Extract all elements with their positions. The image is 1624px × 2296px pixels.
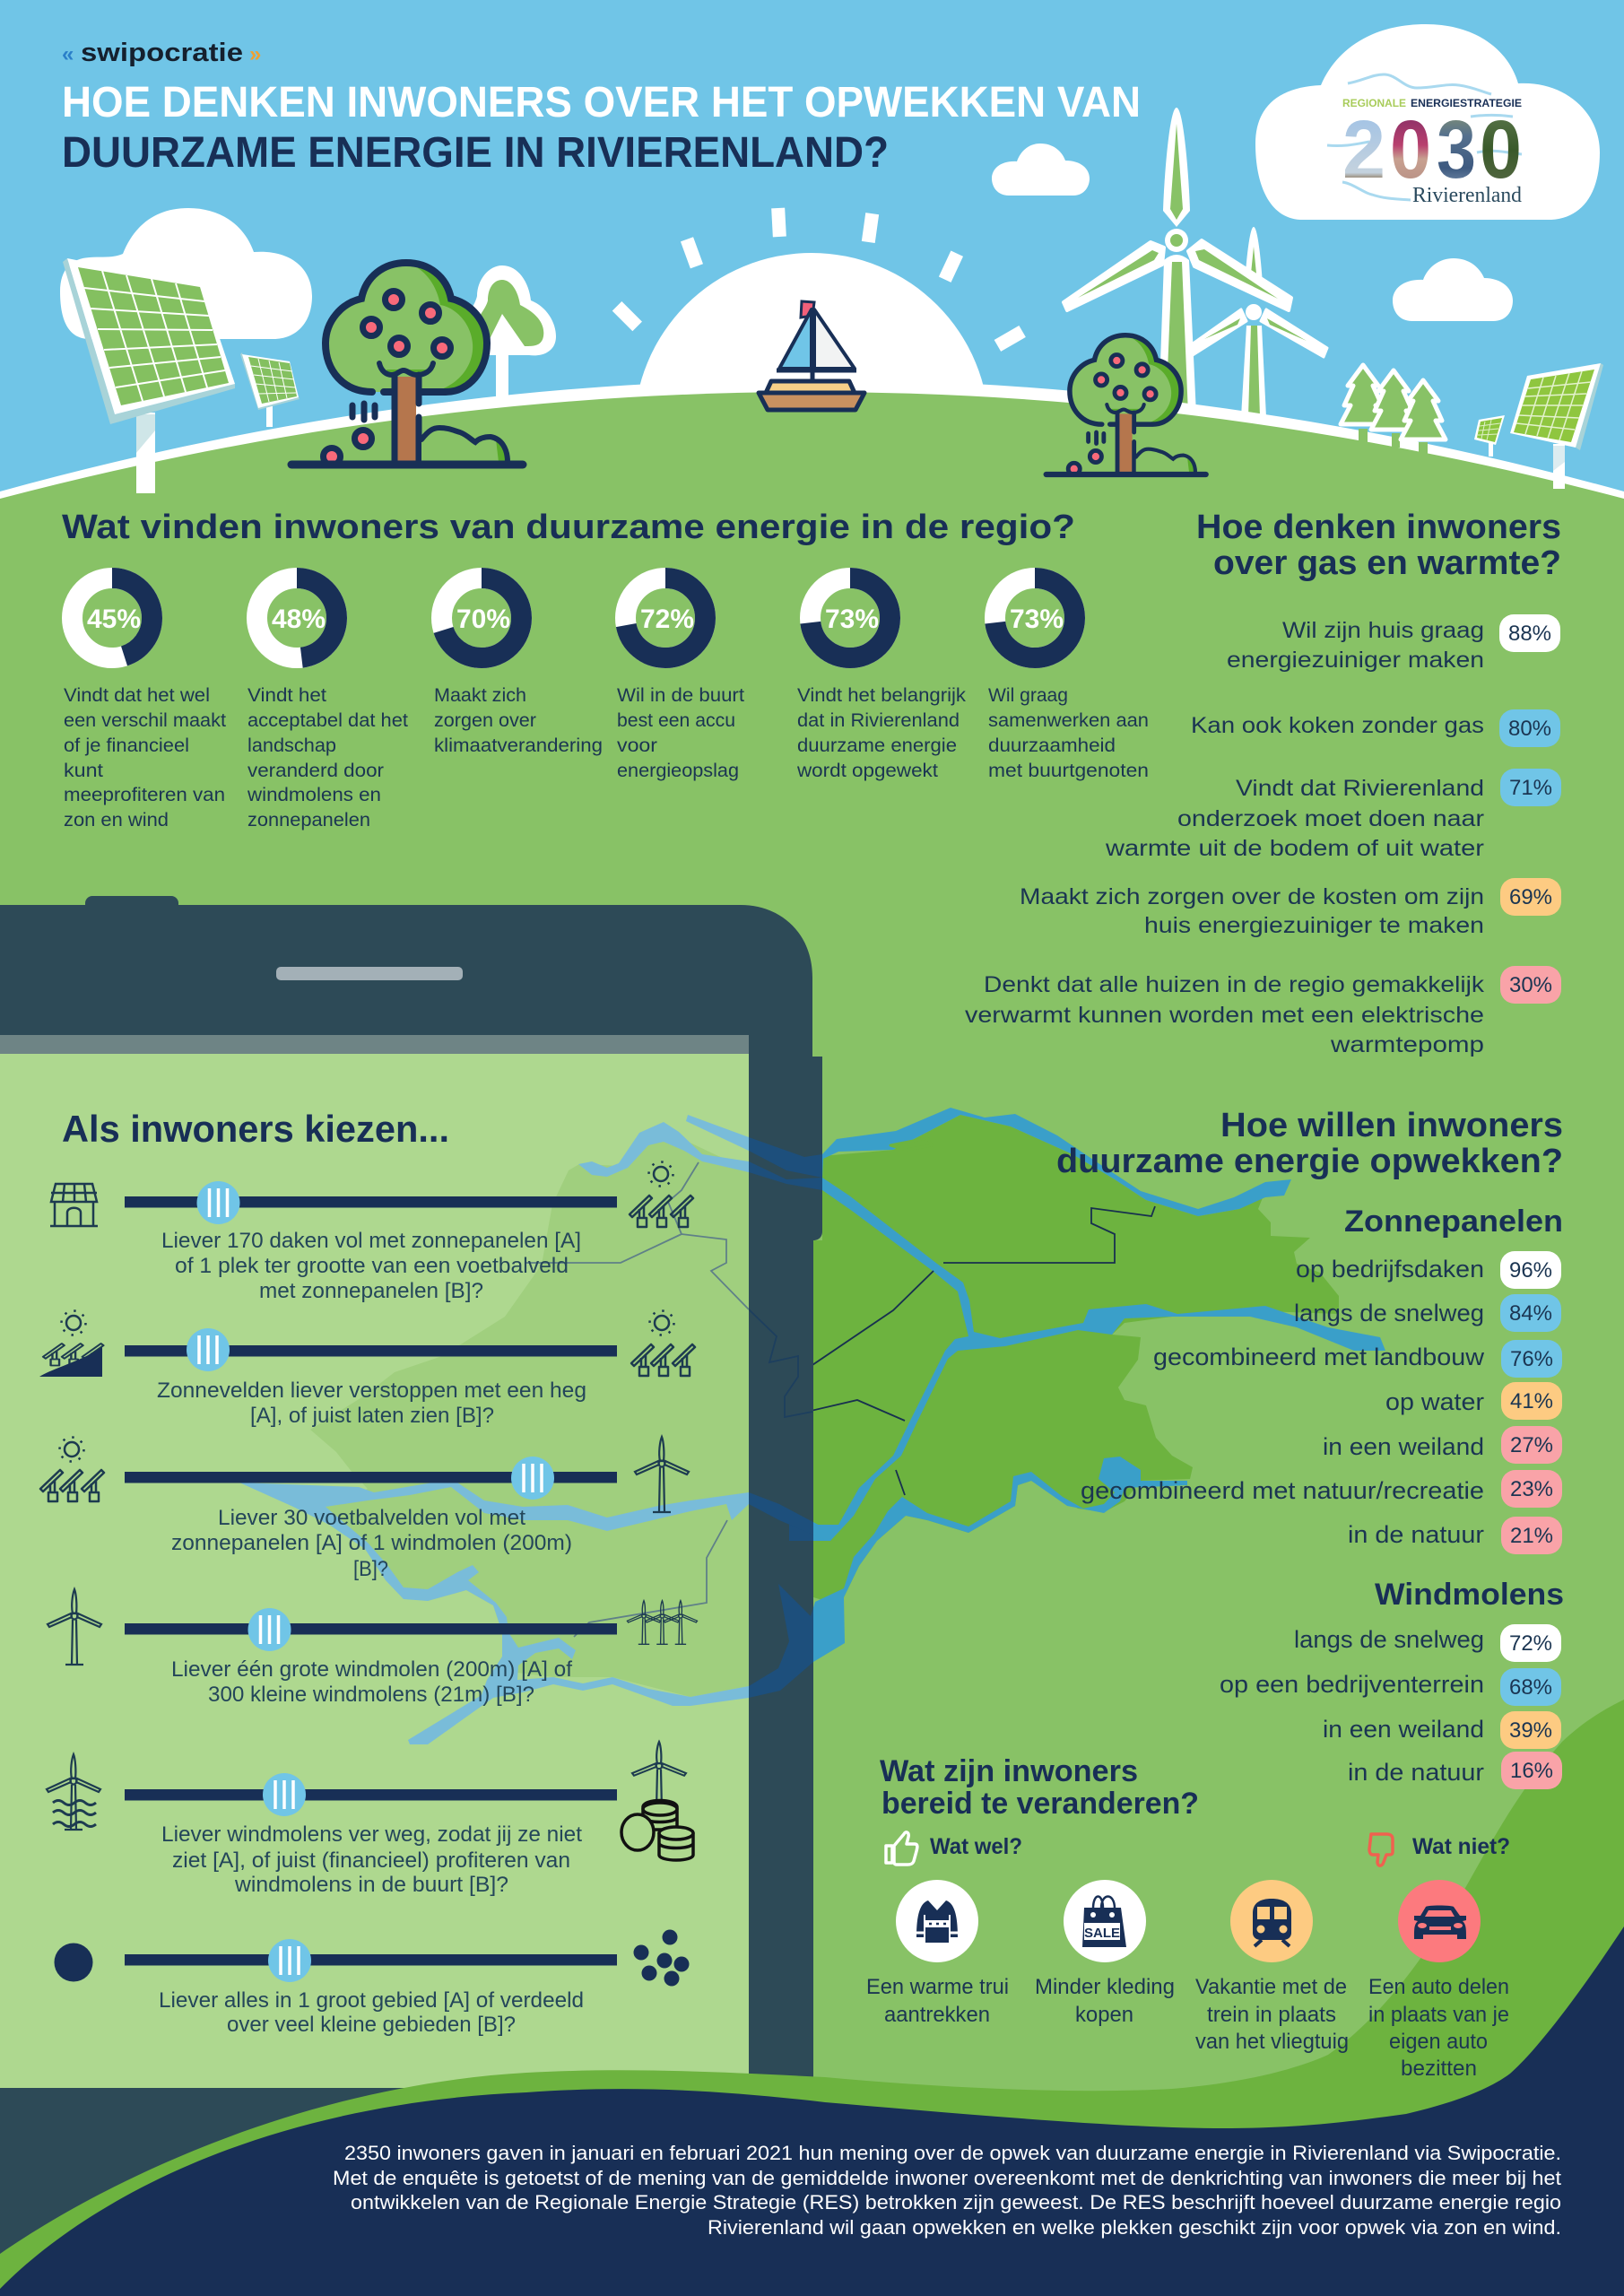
solar panel large right	[1510, 363, 1603, 489]
caption 1	[64, 685, 226, 831]
title	[62, 79, 1141, 177]
row 80%	[1191, 709, 1560, 747]
curve: bottom navy	[0, 1926, 1624, 2296]
caption slider 2: Zonnevelden liever verstoppen met een heg	[157, 1378, 586, 1403]
row 30%	[965, 966, 1561, 1057]
logo cloud: Regionale Energiestrategie 2030 Rivierenland: 0	[1390, 104, 1431, 196]
map of Rivierenland	[239, 1108, 1385, 1744]
heading: opwekken: Hoe willen inwoners	[1220, 1107, 1563, 1144]
icon: thumbs up	[886, 1832, 917, 1865]
logo cloud: Regionale Energiestrategie 2030 Rivierenland: 2	[1342, 104, 1385, 196]
row gecombineerd met natuur: gecombineerd met natuur/recreatie	[1081, 1477, 1484, 1504]
logo cloud: Regionale Energiestrategie 2030 Rivierenland: REGIONALE	[1342, 99, 1406, 109]
caption 2: Vindt het	[248, 685, 326, 706]
caption 3: zorgen over	[434, 710, 536, 731]
caption 2: zonnepanelen	[248, 810, 370, 831]
icon: shopping bag sale: SALE	[1084, 1926, 1120, 1941]
row in een weiland: 27%	[1510, 1433, 1553, 1457]
icon: sun and solar field	[631, 1311, 695, 1376]
icon: wind turbine	[48, 1589, 101, 1665]
slider 4	[48, 1589, 698, 1707]
icon: one area	[54, 1943, 93, 1982]
logo cloud: Regionale Energiestrategie 2030 Rivierenland: 3	[1437, 104, 1476, 196]
caption slider 5: windmolens in de buurt [B]?	[234, 1873, 508, 1897]
heading: bereid te veranderen: bereid te veranderen?	[881, 1787, 1199, 1821]
logo cloud: Regionale Energiestrategie 2030 Rivierenland: 0	[1480, 104, 1522, 196]
donut 72%: 72%	[640, 604, 694, 634]
icon: car	[1398, 1880, 1481, 1962]
cloud left behind solar panel	[60, 208, 312, 339]
row 71%: warmte uit de bodem of uit water	[1105, 836, 1484, 861]
caption 6: duurzaamheid	[988, 735, 1116, 756]
row langs de snelweg: 84%	[1509, 1301, 1552, 1326]
title: HOE DENKEN INWONERS OVER HET OPWEKKEN VAN	[62, 79, 1141, 126]
donut captions	[64, 685, 1149, 831]
subheading: zonnepanelen: Zonnepanelen	[1344, 1205, 1563, 1239]
caption: minder kleding: kopen	[1075, 2003, 1133, 2027]
row op een bedrijventerrein: 68%	[1509, 1675, 1552, 1700]
row in de natuur	[1348, 1752, 1562, 1789]
sun	[612, 208, 1026, 608]
caption 2: acceptabel dat het	[248, 710, 408, 731]
caption 6: Wil graag	[988, 685, 1068, 706]
caption 6: samenwerken aan	[988, 710, 1149, 731]
caption: warme trui: Een warme trui	[866, 1975, 1009, 1999]
caption 3	[434, 685, 603, 756]
caption slider 3: Liever 30 voetbalvelden vol met	[218, 1506, 525, 1530]
panel: als inwoners kiezen	[39, 1108, 698, 2037]
donut 48%: 48%	[272, 604, 326, 634]
caption 6	[988, 685, 1149, 781]
icon: train	[1230, 1880, 1313, 1962]
row 71%: Vindt dat Rivierenland	[1236, 776, 1484, 801]
row op een bedrijventerrein	[1220, 1668, 1561, 1706]
donut 70%	[441, 578, 522, 658]
slider 3	[40, 1437, 689, 1581]
caption 2	[247, 685, 408, 831]
caption: trein: van het vliegtuig	[1195, 2030, 1349, 2054]
donut 45%	[72, 578, 152, 658]
row op water: 41%	[1510, 1389, 1553, 1413]
caption slider 3	[171, 1506, 572, 1581]
footer text: Met de enquête is getoetst of de mening van de gemiddelde inwoner overeenkomt met de denkrichting van inwoners die meer bij het	[333, 2167, 1562, 2189]
caption 3: klimaatverandering	[434, 735, 603, 756]
row in een weiland	[1323, 1426, 1562, 1464]
icon: warm sweater	[896, 1880, 978, 1962]
row in een weiland: in een weiland	[1323, 1433, 1484, 1460]
row in de natuur: in de natuur	[1348, 1759, 1484, 1786]
apple tree right	[1046, 335, 1206, 474]
row langs de snelweg	[1294, 1624, 1561, 1662]
caption slider 1: of 1 plek ter grootte van een voetbalveld	[175, 1254, 569, 1278]
row 69%: Maakt zich zorgen over de kosten om zijn	[1020, 884, 1484, 909]
caption 2: veranderd door	[248, 761, 384, 781]
donut 73% buurt: 73%	[1010, 604, 1064, 634]
donut 70%: 70%	[456, 604, 510, 634]
sky background	[0, 0, 1624, 556]
slider 6	[54, 1930, 689, 2037]
map: land and water on screen	[240, 1115, 749, 1744]
row in een weiland	[1323, 1711, 1561, 1749]
logo cloud: Regionale Energiestrategie 2030 Rivierenland: ENERGIESTRATEGIE	[1411, 99, 1522, 109]
caption 5: wordt opgewekt	[796, 761, 938, 781]
heading: bereid te veranderen	[880, 1754, 1199, 1821]
donut 73% buurt	[995, 578, 1074, 658]
caption 1: zon en wind	[64, 810, 169, 831]
caption: warme trui: aantrekken	[884, 2003, 990, 2027]
caption: auto delen: Een auto delen	[1368, 1975, 1509, 1999]
solar panel large left	[63, 258, 235, 493]
wind turbine small	[1189, 227, 1327, 417]
tablet body	[0, 896, 822, 2296]
solar panel small left	[240, 352, 300, 427]
row gecombineerd met landbouw: 76%	[1510, 1347, 1553, 1371]
row op een bedrijventerrein: op een bedrijventerrein	[1220, 1671, 1484, 1698]
row 80%: 80%	[1508, 717, 1551, 741]
row 71%	[1105, 769, 1561, 861]
pine trees	[1341, 365, 1446, 457]
heading: bereid te veranderen: Wat zijn inwoners	[880, 1754, 1138, 1788]
row 30%: 30%	[1509, 973, 1552, 997]
caption 6: met buurtgenoten	[988, 761, 1149, 781]
logo cloud: Regionale Energiestrategie 2030 Rivierenland: Rivierenland	[1412, 184, 1522, 207]
label: wat niet: Wat niet?	[1412, 1834, 1510, 1859]
caption: trein: trein in plaats	[1207, 2003, 1336, 2027]
footer text	[333, 2142, 1562, 2239]
row in de natuur: 21%	[1510, 1524, 1553, 1548]
row langs de snelweg: 72%	[1509, 1631, 1552, 1656]
row op bedrijfsdaken	[1296, 1251, 1561, 1289]
title: DUURZAME ENERGIE IN RIVIERENLAND?	[62, 129, 889, 177]
row 69%: 69%	[1509, 885, 1552, 909]
row 88%: 88%	[1508, 622, 1551, 646]
row 71%: 71%	[1509, 776, 1552, 800]
heading: als inwoners kiezen: Als inwoners kiezen...	[62, 1108, 449, 1150]
heading: opwekken: duurzame energie opwekken?	[1056, 1143, 1563, 1180]
row op water	[1385, 1382, 1562, 1420]
icon: wind turbine with coins	[621, 1742, 693, 1860]
caption: auto delen: in plaats van je	[1368, 2003, 1509, 2027]
icon: many small areas	[633, 1930, 689, 1986]
row langs de snelweg: langs de snelweg	[1294, 1626, 1484, 1653]
row gecombineerd met natuur: 23%	[1510, 1477, 1553, 1501]
caption: auto delen	[1368, 1975, 1509, 2081]
heading: gas en warmte: over gas en warmte?	[1213, 544, 1561, 582]
caption: minder kleding	[1035, 1975, 1175, 2027]
icon: sun and solar field	[630, 1162, 693, 1227]
swipocratie logo: «	[62, 42, 74, 66]
icon: thumbs down	[1369, 1834, 1393, 1866]
map: land and water outside tablet	[813, 1108, 1385, 1662]
icon: three small wind turbines	[627, 1601, 698, 1644]
donut 73% klimaat: 73%	[825, 604, 879, 634]
caption slider 5	[161, 1822, 582, 1897]
caption 4: energieopslag	[617, 761, 739, 781]
row 88%	[1227, 614, 1560, 673]
row gecombineerd met landbouw	[1153, 1340, 1562, 1378]
footer text: ontwikkelen van de Regionale Energie Strategie (RES) betrokken zijn geweest. De RES beschrijft hoeveel duurzame energie regio	[351, 2191, 1561, 2213]
caption 4: voor	[617, 735, 657, 756]
solar panel small right	[1474, 415, 1505, 457]
caption 5: Vindt het belangrijk	[797, 685, 967, 706]
row 80%: Kan ook koken zonder gas	[1191, 713, 1484, 738]
caption 1: of je financieel	[64, 735, 189, 756]
swipocratie logo: swipocratie	[81, 39, 243, 67]
heading: regio: Wat vinden inwoners van duurzame energie in de regio?	[62, 509, 1075, 546]
caption 2: landschap	[248, 735, 336, 756]
map: borders	[526, 1162, 1155, 1637]
row gecombineerd met natuur	[1081, 1470, 1562, 1508]
icon: house with solar roof	[50, 1184, 98, 1226]
footer text: 2350 inwoners gaven in januari en februari 2021 hun mening over de opwek van duurzame energie in Rivierenland via Swipocratie.	[344, 2142, 1561, 2164]
subheading: windmolens: Windmolens	[1375, 1578, 1564, 1612]
label: wat wel: Wat wel?	[930, 1834, 1022, 1859]
heading: opwekken	[1056, 1107, 1563, 1180]
caption slider 3: [B]?	[353, 1557, 388, 1581]
background tree	[465, 265, 556, 399]
list: windmolens	[1220, 1624, 1562, 1789]
icon: sun and solar field	[40, 1437, 104, 1501]
caption 5: duurzame energie	[797, 735, 957, 756]
cloud small top	[992, 144, 1090, 196]
slider 1	[50, 1162, 693, 1303]
caption 1: meeprofiteren van	[64, 785, 225, 805]
row 71%: onderzoek moet doen naar	[1177, 806, 1484, 831]
heading: gas en warmte: Hoe denken inwoners	[1196, 509, 1561, 546]
caption slider 1	[161, 1229, 581, 1303]
row langs de snelweg	[1294, 1294, 1561, 1332]
row op bedrijfsdaken: op bedrijfsdaken	[1296, 1256, 1484, 1283]
donut charts	[72, 578, 1074, 658]
caption 5: dat in Rivierenland	[797, 710, 960, 731]
curve: bottom darker green	[0, 1700, 1624, 2296]
caption 1: Vindt dat het wel	[64, 685, 210, 706]
caption slider 1: met zonnepanelen [B]?	[259, 1279, 483, 1303]
map: water on tablet edge	[749, 1137, 822, 1698]
heading: gas en warmte	[1196, 509, 1561, 582]
sailboat	[759, 301, 864, 410]
caption slider 5: ziet [A], of juist (financieel) profiteren van	[172, 1848, 570, 1873]
donut 72%	[626, 578, 705, 658]
donut 48%	[256, 578, 337, 658]
caption slider 1: Liever 170 daken vol met zonnepanelen [A]	[161, 1229, 581, 1253]
caption slider 6	[159, 1988, 584, 2037]
caption: minder kleding: Minder kleding	[1035, 1975, 1175, 1999]
caption slider 5: Liever windmolens ver weg, zodat jij ze niet	[161, 1822, 582, 1847]
caption: auto delen: bezitten	[1401, 2057, 1477, 2081]
slider 2	[39, 1311, 695, 1428]
caption 2: windmolens en	[247, 785, 381, 805]
caption slider 4	[171, 1657, 572, 1707]
icon: wind turbine	[635, 1437, 689, 1512]
row 88%: Wil zijn huis graag	[1282, 618, 1484, 643]
row 30%: warmtepomp	[1330, 1032, 1484, 1057]
caption 4: Wil in de buurt	[617, 685, 744, 706]
row op water: op water	[1385, 1388, 1484, 1415]
row 69%: huis energiezuiniger te maken	[1144, 913, 1484, 938]
row langs de snelweg: langs de snelweg	[1294, 1300, 1484, 1326]
row op bedrijfsdaken: 96%	[1509, 1258, 1552, 1283]
caption 5	[796, 685, 967, 781]
caption: trein: Vakantie met de	[1195, 1975, 1347, 1999]
icon: solar field behind hedge	[39, 1311, 103, 1377]
footer text: Rivierenland wil gaan opwekken en welke plekken geschikt zijn voor opwek via zon en wind.	[708, 2216, 1561, 2239]
row 30%: Denkt dat alle huizen in de regio gemakkelijk	[984, 972, 1485, 997]
caption slider 3: zonnepanelen [A] of 1 windmolen (200m)	[171, 1531, 572, 1555]
row in de natuur: in de natuur	[1348, 1521, 1484, 1548]
caption slider 6: over veel kleine gebieden [B]?	[227, 2013, 516, 2037]
wind turbine large	[1064, 108, 1291, 414]
caption slider 2	[157, 1378, 586, 1428]
caption slider 2: [A], of juist laten zien [B]?	[250, 1404, 494, 1428]
caption slider 4: Liever één grote windmolen (200m) [A] of	[171, 1657, 572, 1682]
caption slider 4: 300 kleine windmolens (21m) [B]?	[208, 1683, 534, 1707]
caption: auto delen: eigen auto	[1389, 2030, 1488, 2054]
list: gas en warmte	[965, 614, 1561, 1057]
row in de natuur: 16%	[1510, 1759, 1553, 1783]
caption: trein	[1195, 1975, 1349, 2054]
slider 5	[47, 1742, 693, 1897]
donut 45%: 45%	[87, 604, 141, 634]
apple tree left	[291, 263, 523, 465]
row in de natuur	[1348, 1517, 1562, 1554]
swipocratie logo: »	[249, 42, 261, 66]
row 30%: verwarmt kunnen worden met een elektrische	[965, 1003, 1484, 1028]
caption 3: Maakt zich	[434, 685, 526, 706]
caption 4	[617, 685, 744, 781]
logo cloud: Regionale Energiestrategie 2030 Rivierenland	[1255, 24, 1600, 220]
row 69%	[1020, 878, 1561, 938]
row gecombineerd met landbouw: gecombineerd met landbouw	[1153, 1344, 1485, 1370]
row in een weiland: in een weiland	[1323, 1716, 1484, 1743]
row in een weiland: 39%	[1509, 1718, 1552, 1743]
caption 4: best een accu	[617, 710, 735, 731]
donut 73% klimaat	[811, 578, 890, 658]
caption slider 6: Liever alles in 1 groot gebied [A] of verdeeld	[159, 1988, 584, 2013]
row 88%: energiezuiniger maken	[1227, 648, 1484, 673]
panel: bereid te veranderen	[866, 1754, 1510, 2081]
list: zonnepanelen	[1081, 1251, 1562, 1554]
cloud right	[1393, 258, 1513, 321]
icon: shopping bag sale	[1064, 1880, 1146, 1962]
caption 1: kunt	[64, 761, 103, 781]
icon: offshore wind turbine	[47, 1754, 100, 1830]
caption: warme trui	[866, 1975, 1009, 2027]
caption 1: een verschil maakt	[64, 710, 226, 731]
